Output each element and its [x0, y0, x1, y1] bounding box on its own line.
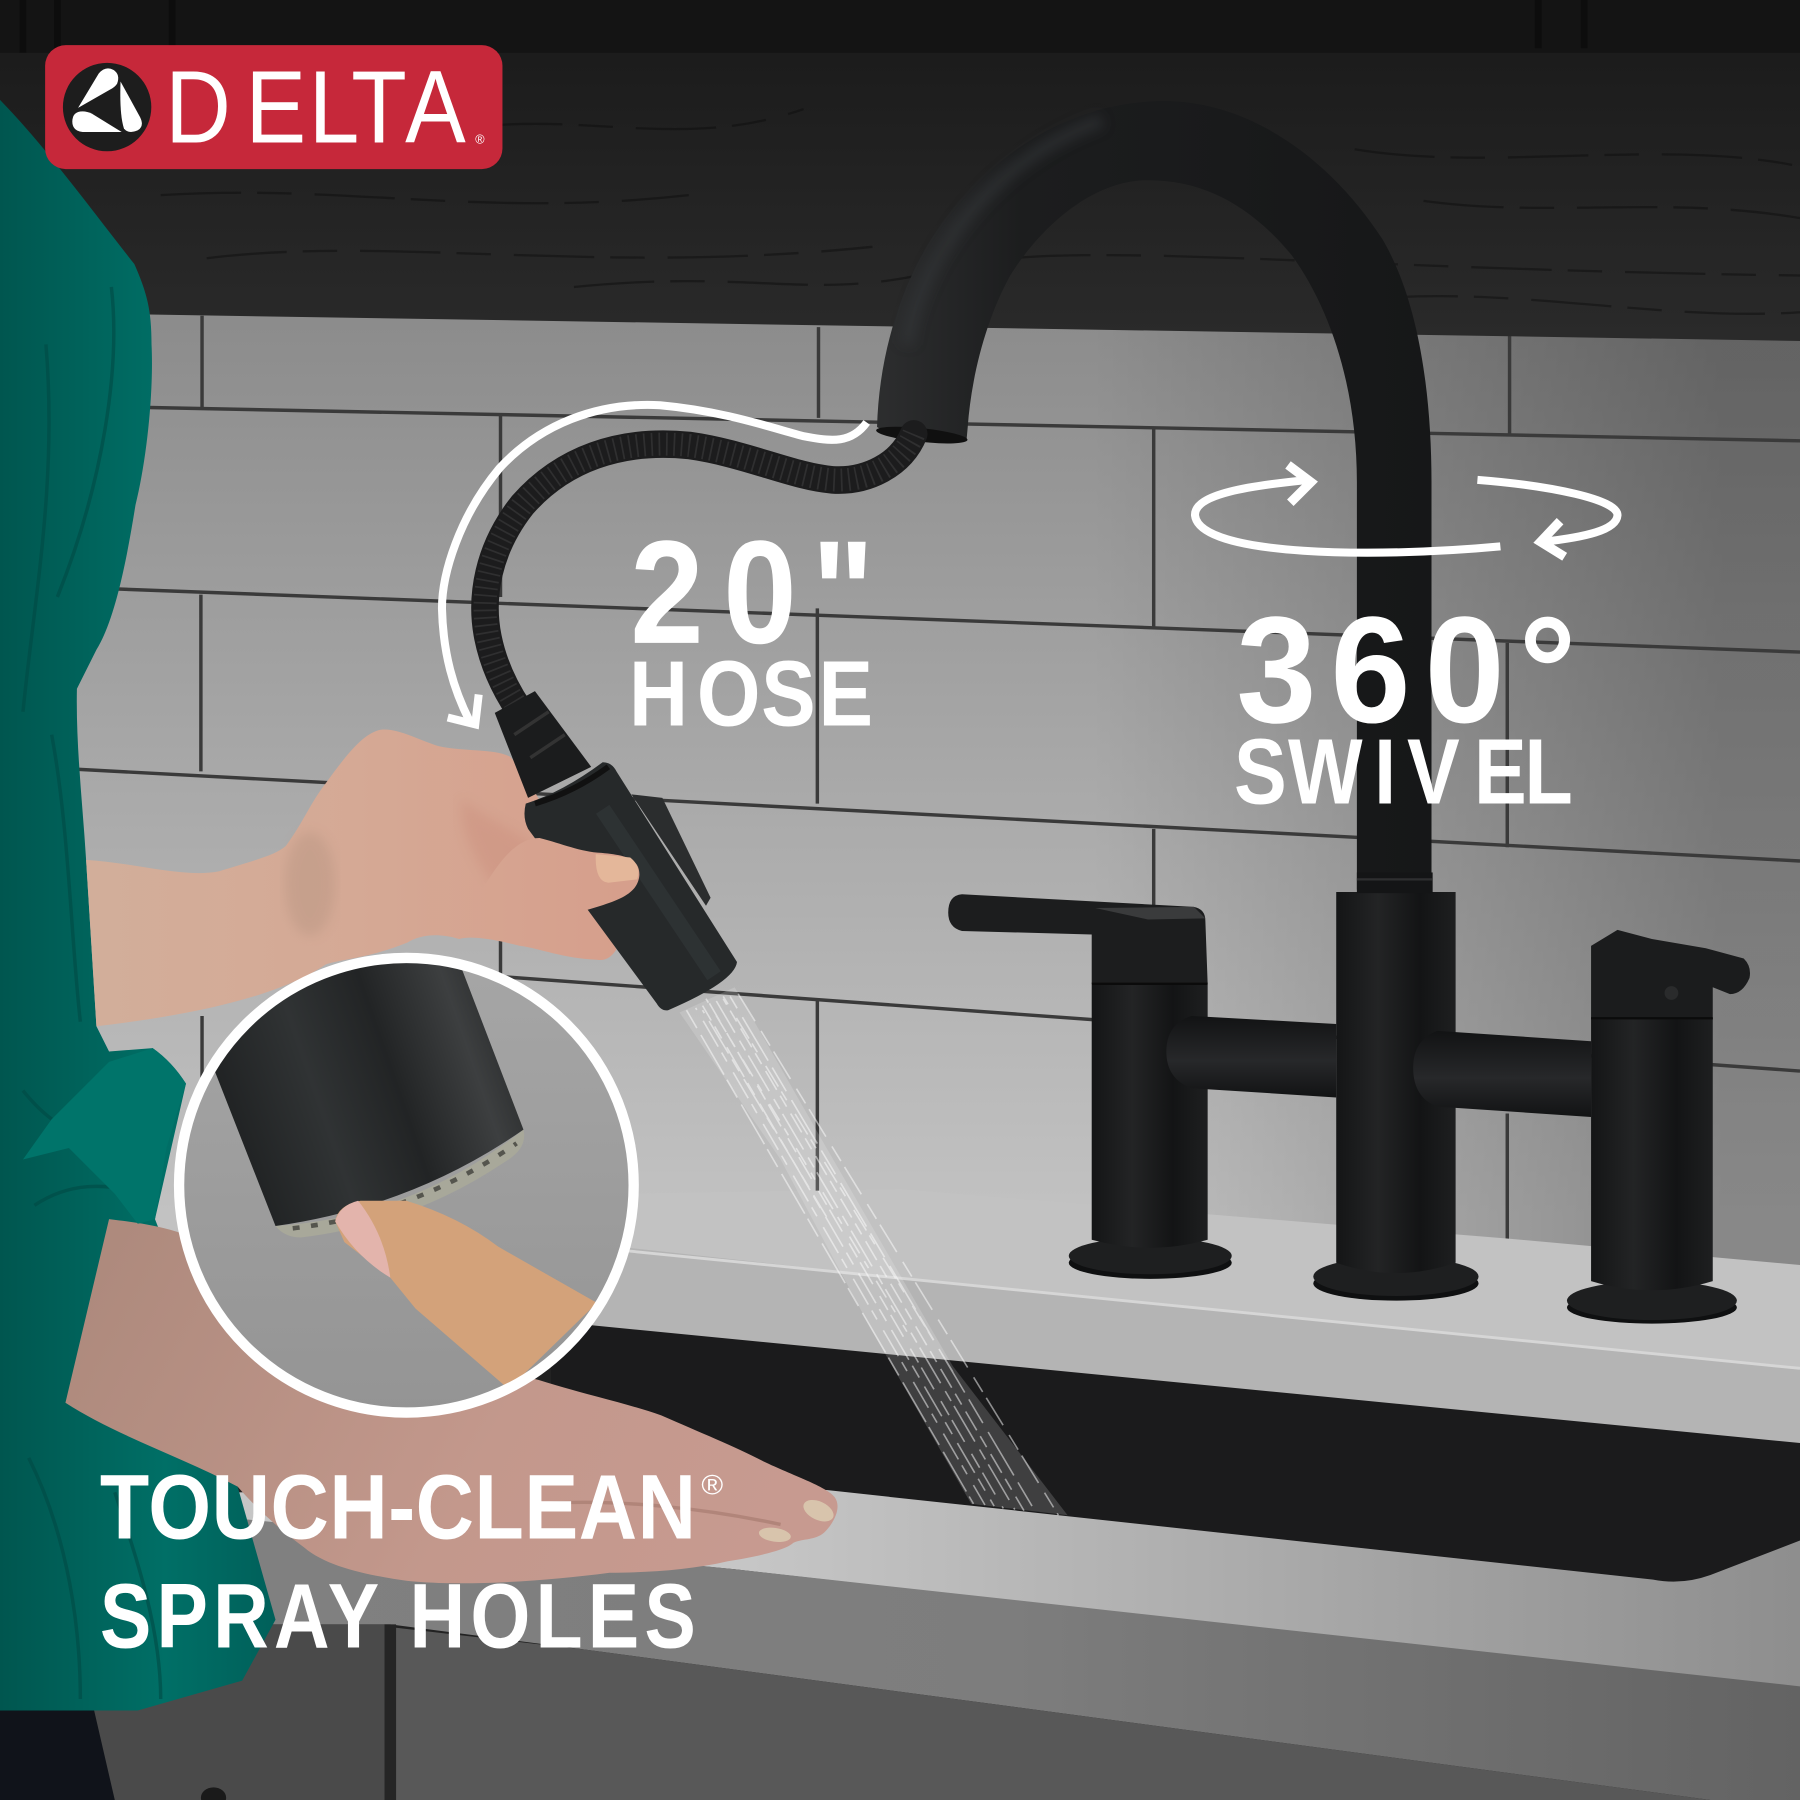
pull-down sprayer [495, 691, 737, 1010]
pants [0, 1710, 115, 1800]
Delta logo badge: DELTA [165, 49, 466, 165]
lower hand [65, 1219, 838, 1583]
inset circle: touch-clean spray holes [179, 947, 634, 1413]
logo mark [63, 63, 151, 151]
tile backsplash wall [0, 298, 1800, 1309]
arrow: 360 swivel [1195, 465, 1617, 557]
sink front and cabinet [92, 1518, 1800, 1800]
faucet [875, 101, 1750, 1324]
callout: touch-clean spray holes [100, 1457, 723, 1667]
right handle [1567, 930, 1750, 1324]
finger [335, 1201, 597, 1389]
spray head close-up [207, 947, 524, 1238]
callout: 360 degree swivel: 360° [1236, 586, 1576, 755]
countertop [551, 1189, 1800, 1444]
callout: touch-clean spray holes: TOUCH-CLEAN [100, 1457, 696, 1558]
dark wood cabinet [0, 0, 1800, 341]
braided hose [485, 434, 914, 709]
water spray [680, 987, 1068, 1515]
callout: 20 inch hose: HOSE [629, 642, 873, 746]
Delta logo badge [45, 45, 502, 169]
Delta logo badge: ® [475, 132, 485, 146]
thumb [482, 838, 639, 916]
dark sink opening [551, 1321, 1800, 1584]
centre column [1313, 872, 1479, 1301]
callout: 360 degree swivel: SWIVEL [1234, 721, 1573, 824]
callout: 20 inch hose: 20" [630, 509, 874, 674]
callout: touch-clean spray holes: ® [701, 1470, 723, 1501]
arrow: hose extension [442, 405, 867, 724]
spout gooseneck [877, 101, 1432, 890]
crossbars [1166, 1016, 1336, 1097]
callout: 20 inch hose [629, 509, 874, 746]
white sink rim [230, 1490, 1800, 1690]
shirt cuff [23, 1048, 186, 1224]
shirt [0, 100, 276, 1710]
upper hand holding sprayer [86, 730, 616, 1026]
left handle [948, 894, 1232, 1279]
callout: touch-clean spray holes: SPRAY HOLES [100, 1564, 696, 1667]
